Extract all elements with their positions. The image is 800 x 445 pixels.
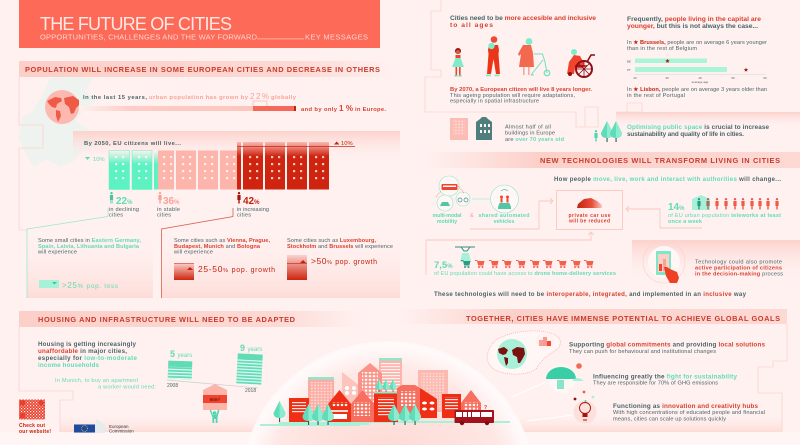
chart: age bars: BE [627, 60, 631, 64]
text: shared automated vehicles: shared automated [478, 213, 530, 219]
europe map [18, 75, 98, 167]
text: lisbon [627, 86, 767, 99]
text: ageing population: especially in spatial infrastructure [450, 98, 539, 104]
panel: increasing cities [161, 208, 400, 298]
text: website link: our website! [19, 429, 51, 435]
icon: wheelchair [567, 49, 595, 77]
panel: declining cities: Some small cities in Eastern Germany, [38, 238, 141, 244]
label: 2008: 2008 [167, 383, 178, 389]
city dome [247, 341, 529, 445]
bottom fades [0, 112, 800, 445]
text: urban growth: and by only [301, 107, 338, 113]
text: global commitments: They can push for behavioural and institutional changes [569, 349, 716, 355]
text: urban growth: 1% [339, 104, 353, 113]
icon: adult [486, 36, 500, 76]
title: THE FUTURE OF CITIES [40, 14, 232, 34]
stat: 22 percent: 22% [116, 196, 133, 207]
icon: globe [45, 90, 79, 124]
text: housing: especially for low-to-moderate [38, 355, 138, 362]
icon: globe bubble [487, 331, 560, 374]
icon: over 50 growth [287, 255, 307, 280]
text: telework: once a week [668, 219, 703, 225]
icon: 25-50 growth [174, 263, 194, 280]
stack: 2018 [236, 353, 263, 385]
panel: increasing cities: Some cities such as Vienna, Prague, [174, 238, 270, 244]
text: old buildings [505, 124, 565, 143]
chart: age bars: PT [627, 68, 631, 72]
text: multi-modal: mobility [437, 219, 457, 225]
text: global commitments [569, 342, 765, 355]
icon: elderly with walker [518, 38, 550, 76]
text: multi-modal [432, 213, 462, 225]
box: private car use [556, 190, 622, 230]
text: website link: Check out [19, 423, 45, 429]
text: shared automated vehicles [478, 213, 530, 225]
arrow: mobility to car [470, 198, 553, 229]
label: 2018: 2018 [245, 388, 256, 394]
text: capital intro [627, 16, 761, 30]
text: public space: Optimising public space is crucial to increase [627, 124, 769, 131]
panel: declining cities: Spain, Latvia, Lithuania and Bulgaria [38, 244, 140, 250]
header banner [19, 0, 380, 48]
text: drone delivery: of EU population could have access to drone home-delivery services [434, 271, 616, 277]
stat: 36 percent [157, 192, 180, 218]
section heading: housing [19, 311, 360, 327]
stat: 36 percent: cities [157, 212, 171, 218]
section heading: technologies: NEW TECHNOLOGIES WILL TRANSFORM LIVING IN CITIES [540, 156, 780, 165]
icon: loss [39, 280, 59, 288]
logo: european commission: Commission [109, 428, 134, 434]
text: public space: sustainability and quality of life in cities. [627, 131, 744, 138]
icon: old building [476, 117, 492, 140]
section heading: accessibility [450, 15, 596, 29]
icon: drone and carts [455, 247, 594, 268]
text: urban growth: globally [271, 95, 297, 101]
icon: tree and sustainability [512, 363, 584, 397]
logo: european commission [74, 419, 134, 434]
box: private car use: private car use [568, 213, 611, 219]
icon: person and trees [594, 121, 622, 142]
icon: child [452, 48, 464, 76]
label: 5 years: 5 years [170, 349, 192, 359]
text: housing: Housing is getting increasingly [38, 341, 137, 348]
marker: plus 10 percent: 10% [341, 141, 353, 147]
illustration: city skyline [260, 358, 510, 426]
heading: By 2050, EU citizens will live... [84, 141, 181, 147]
text: drone delivery [434, 260, 616, 277]
text: drone delivery: 7,5% [434, 260, 453, 271]
panel: declining cities [27, 208, 153, 298]
chart: age bars [627, 58, 767, 84]
marker: plus 10 percent [334, 141, 353, 147]
text: housing: In Munich, to buy an apartment [55, 378, 138, 384]
icon: qr code [19, 400, 45, 420]
arrow: telework to car [626, 206, 702, 228]
stat: 42 percent [237, 192, 269, 218]
text: brussels [627, 39, 767, 52]
text: 25-50 growth: 25-50% pop. growth [198, 264, 275, 274]
text: brussels: than in the rest of Belgium [627, 46, 697, 52]
red houses [289, 385, 481, 422]
panel: increasing cities: Stockholm and Brussels will experience [287, 244, 393, 250]
chart: age bars: 30 [665, 76, 669, 80]
panel: 2050 distribution [73, 131, 400, 190]
text: urban growth: In the last 15 years, [83, 95, 147, 101]
chart: age bars: 20 [633, 76, 637, 80]
icon: multi-modal mobility [436, 176, 470, 211]
section heading: population [19, 61, 391, 77]
icon: car [577, 198, 602, 208]
text: ampersand: & [470, 213, 474, 219]
buildings: declining [109, 150, 158, 190]
text: urban growth: urban population has grown by [149, 95, 249, 101]
panel: participation: active participation of citizens [695, 266, 782, 272]
text: multi-modal: multi-modal [432, 213, 462, 219]
stat: 22 percent: in declining [109, 207, 139, 213]
bus [454, 405, 494, 425]
stat: 36 percent: in stable [157, 207, 180, 213]
text: how people change: How people move, live, work and interact with authorities will change... [554, 177, 781, 183]
chart: age bars: 40 [698, 76, 702, 80]
section heading: accessibility: Cities need to be more accesible and inclusive [450, 15, 596, 22]
text: capital intro: Frequently, people living in the capital are [627, 16, 761, 23]
panel: declining cities: will experience [37, 250, 77, 256]
text: website link [19, 423, 51, 435]
text: participation: Technology could also promote [695, 260, 782, 266]
arrow: drone to car [426, 232, 594, 275]
stat: 42 percent: cities [237, 212, 251, 218]
logo: european commission: European [109, 424, 129, 429]
section heading: technologies [426, 152, 800, 168]
text: telework: 14% [668, 202, 685, 213]
text: old buildings: Almost half of all [505, 124, 551, 130]
trees [274, 379, 421, 425]
text: housing [38, 341, 156, 390]
section heading: population: POPULATION WILL INCREASE IN SOME EUROPEAN CITIES AND DECREASE IN OTHERS [25, 65, 380, 74]
chart: age bars: 50 [731, 76, 735, 80]
text: sustainability [593, 374, 737, 386]
text: old buildings: buildings in Europe [505, 130, 555, 136]
text: urban growth: in Europe. [355, 107, 386, 113]
subtitle: OPPORTUNITIES, CHALLENGES AND THE WAY FORWARD [40, 32, 258, 42]
text: brussels: In ★ Brussels, people are on average 6 years younger [627, 39, 767, 46]
text: telework: of EU urban population teleworks at least [668, 213, 781, 219]
panel: increasing cities: will experience [173, 250, 213, 256]
text: old buildings: are over 70 years old [505, 137, 565, 143]
icon: apartment: 60m² [210, 397, 221, 402]
text: lisbon: in the rest of Portugal [627, 93, 685, 99]
stat: 36 percent: 36% [163, 196, 180, 207]
text: housing: unaffordable in major cities, [38, 348, 127, 355]
stat: 42 percent: in increasing [237, 207, 269, 213]
section heading: housing: HOUSING AND INFRASTRUCTURE WILL NEED TO BE ADAPTED [38, 315, 296, 324]
panel: increasing cities: Budapest, Munich and Bologna [174, 244, 261, 250]
buildings: increasing [237, 142, 355, 190]
text: ageing population [450, 87, 592, 104]
section heading: accessibility: to all ages [450, 22, 493, 29]
panel: increasing cities: Some cities such as Luxembourg, [287, 238, 376, 244]
chart: age bars: 60 [763, 76, 767, 80]
stat: 42 percent: 42% [243, 196, 260, 207]
text: housing: a worker would need: [98, 384, 156, 390]
text: innovation [613, 403, 765, 422]
ground [260, 421, 510, 426]
box: private car use: will be reduced [568, 218, 610, 224]
stat: 22 percent [109, 192, 139, 218]
text: lisbon: In ★ Lisbon, people are on average 3 years older than [627, 86, 767, 93]
icon: phone [643, 241, 685, 283]
buildings: stable [158, 150, 237, 190]
icon: pink building [450, 118, 468, 140]
text: urban growth [83, 92, 386, 113]
icon: telework people [692, 195, 779, 210]
icon: light bulb [527, 391, 596, 424]
panel: participation [632, 240, 800, 283]
text: shared automated vehicles: vehicles [494, 219, 515, 225]
chart: age bars: average age [692, 80, 709, 84]
marker: minus 10 percent: 10% [93, 157, 105, 163]
section heading: global goals [400, 309, 787, 324]
text: innovation: With high concentrations of educated people and financial [613, 410, 765, 416]
text: urban growth: 22% [250, 92, 269, 101]
text: innovation: Functioning as innovation and creativity hubs [613, 403, 758, 410]
label: 9 years: 9 years [240, 343, 262, 353]
text: housing: income households [38, 362, 100, 369]
text: capital intro: younger, but this is not always the case... [627, 23, 758, 30]
icon: shared vehicles [472, 185, 518, 213]
text: public space [627, 124, 769, 138]
stack: 2008 [168, 361, 192, 379]
text: interoperable: These technologies will need to be interoperable, integrated, and implemented in an inclusive way [434, 291, 747, 298]
stat: 22 percent: cities [109, 212, 123, 218]
text: ageing population: By 2070, a European citizen will live 8 years longer. [450, 87, 592, 93]
text: sustainability: Influencing greatly the fight for sustainability [593, 374, 737, 380]
text: sustainability: They are responsible for 70% of GHG emissions [593, 380, 718, 386]
text: telework [668, 202, 781, 225]
section heading: global goals: TOGETHER, CITIES HAVE IMMENSE POTENTIAL TO ACHIEVE GLOBAL GOALS [466, 314, 780, 323]
growth bar [79, 101, 296, 111]
text: loss: >25% pop. loss [62, 281, 119, 290]
text: innovation: means, cities can scale up solutions quickly [613, 416, 726, 422]
key messages label: KEY MESSAGES [305, 32, 368, 42]
icon: person lifting [210, 410, 220, 423]
pale towers [308, 358, 448, 420]
text: over 50 growth: >50% pop. growth [311, 256, 377, 266]
text: ageing population: This ageing population will require adaptations, [450, 93, 575, 99]
text: global commitments: Supporting global commitments and providing local solutions [569, 342, 765, 348]
panel: participation: in the decision-making process [695, 272, 783, 278]
chart: years of salary [167, 343, 263, 423]
marker: minus 10 percent [85, 157, 105, 163]
bus: ? [484, 405, 487, 411]
